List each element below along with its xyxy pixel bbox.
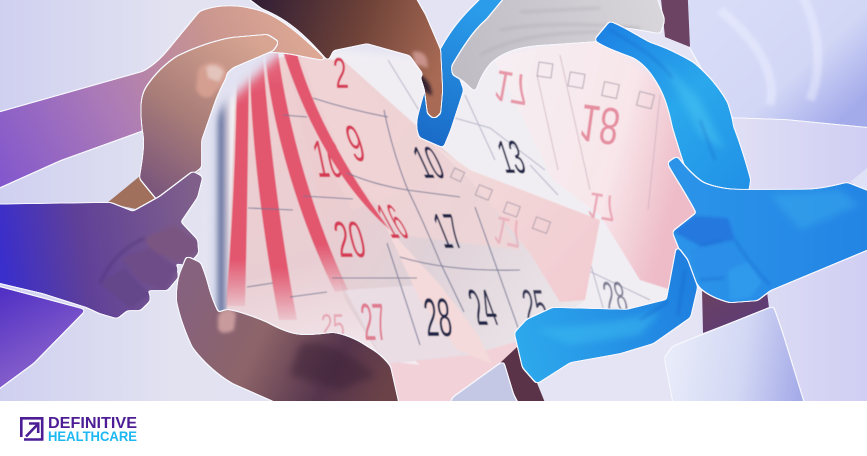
mirrored pink dates on page back: 17 xyxy=(490,207,527,255)
wrist: top right xyxy=(659,0,690,47)
faint pink dates bottom: 25 xyxy=(320,307,346,344)
faint pink dates bottom: 27 xyxy=(357,292,391,352)
red dates: 2 xyxy=(331,50,351,98)
mirrored pink dates on page back: 17 xyxy=(584,184,620,230)
right page with pink rim xyxy=(597,65,695,290)
black dates: 24 xyxy=(461,279,505,336)
black dates: 17 xyxy=(426,204,470,259)
glove: blue top right arc xyxy=(595,22,750,192)
glove: blue right fist with raised thumb xyxy=(668,157,867,302)
lighter lower page area xyxy=(346,286,430,362)
back page: white base xyxy=(230,50,668,309)
partly hidden red date: 10 xyxy=(308,129,347,188)
glove: blue bottom xyxy=(515,247,697,383)
small boxes on curled page xyxy=(450,168,551,233)
black dates: 25 xyxy=(518,280,552,333)
hand: front palm and thumb xyxy=(140,35,278,200)
arm: lower right behind fist xyxy=(702,288,769,333)
left page shadow xyxy=(208,98,230,311)
curled pink page xyxy=(442,150,600,302)
wrist: left behind fist xyxy=(107,170,200,212)
cuff: right edge xyxy=(850,168,867,190)
small date boxes on right page xyxy=(537,62,654,109)
red dates: 16 xyxy=(368,194,417,249)
black dates: 13 xyxy=(491,131,531,183)
right page faint vertical lines xyxy=(537,55,660,210)
main grid page xyxy=(318,70,581,356)
bottom pink floor xyxy=(389,342,517,401)
red ribbon 4 xyxy=(283,52,390,230)
mirrored pink dates on page back xyxy=(494,70,620,248)
red dates xyxy=(334,57,408,258)
sleeve: bottom right xyxy=(664,307,804,401)
red ribbon 2 xyxy=(250,56,297,320)
black dates: 28 xyxy=(599,274,632,322)
forearm: lower left xyxy=(0,282,85,402)
sheet edge continuing ribbon xyxy=(385,225,484,354)
sleeve: top right xyxy=(687,0,867,129)
black dates: 10 xyxy=(405,138,452,189)
lower left page xyxy=(226,52,420,365)
faint pink dates bottom xyxy=(322,302,384,340)
glove: gray top center xyxy=(452,0,664,91)
mirrored pink dates on page back: 18 xyxy=(575,92,623,157)
logo: Definitive Healthcare: HEALTHCARE xyxy=(48,428,137,444)
pale sheet beside ribbon xyxy=(385,147,516,248)
logo: Definitive Healthcare xyxy=(21,415,137,444)
glove: blue under gray, top center xyxy=(416,0,502,147)
hand: top dark xyxy=(225,0,442,118)
arm and hand: upper left pink xyxy=(0,6,326,196)
back page grid lines xyxy=(388,60,650,318)
red ribbon 3 xyxy=(265,52,348,292)
wrist: bottom center xyxy=(500,347,544,401)
logo icon xyxy=(21,418,42,440)
red dates: 20 xyxy=(329,211,371,268)
hand: left fist with thumb xyxy=(0,172,202,318)
mirrored pink dates on page back: 17 xyxy=(490,60,533,113)
red ribbon 1 xyxy=(226,70,249,306)
red dates: 9 xyxy=(339,115,372,172)
black dates xyxy=(413,140,628,338)
logo wordmark: DEFINITIVE xyxy=(48,415,137,432)
sleeve: bottom center xyxy=(450,362,518,401)
grid lines xyxy=(247,98,520,345)
pink upper cell of main page xyxy=(284,52,408,210)
hand: bottom cupped xyxy=(177,257,402,420)
calendar xyxy=(212,42,694,401)
black dates: 28 xyxy=(420,287,455,348)
